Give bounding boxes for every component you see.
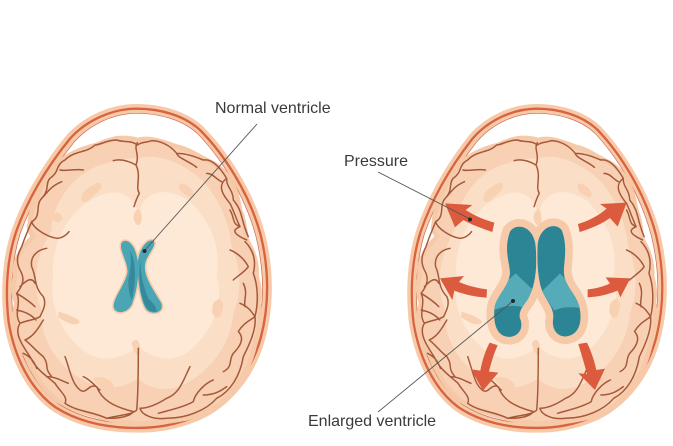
label: pressure: Pressure <box>344 153 408 170</box>
arrow: upper right <box>578 203 627 232</box>
label: enlarged ventricle: Enlarged ventricle <box>308 413 436 430</box>
enlarged ventricles <box>494 226 580 337</box>
label: normal ventricle <box>142 100 331 253</box>
arrow: upper left <box>445 203 494 232</box>
normal ventricle <box>114 240 162 313</box>
panel: normal brain <box>2 104 272 433</box>
panel: enlarged brain <box>407 104 667 433</box>
label: pressure <box>344 153 472 222</box>
arrow: middle right <box>588 277 630 297</box>
icon: head cross-section, normal <box>2 104 272 433</box>
arrow: lower right <box>578 343 605 390</box>
icon: head cross-section, hydrocephalus <box>407 104 667 433</box>
label: normal ventricle: Normal ventricle <box>215 100 331 117</box>
pressure arrows <box>440 203 630 391</box>
arrow: middle left <box>440 276 487 300</box>
arrow: lower left <box>471 343 498 391</box>
enlarged ventricle halo <box>494 226 581 337</box>
label: enlarged ventricle <box>308 299 515 430</box>
